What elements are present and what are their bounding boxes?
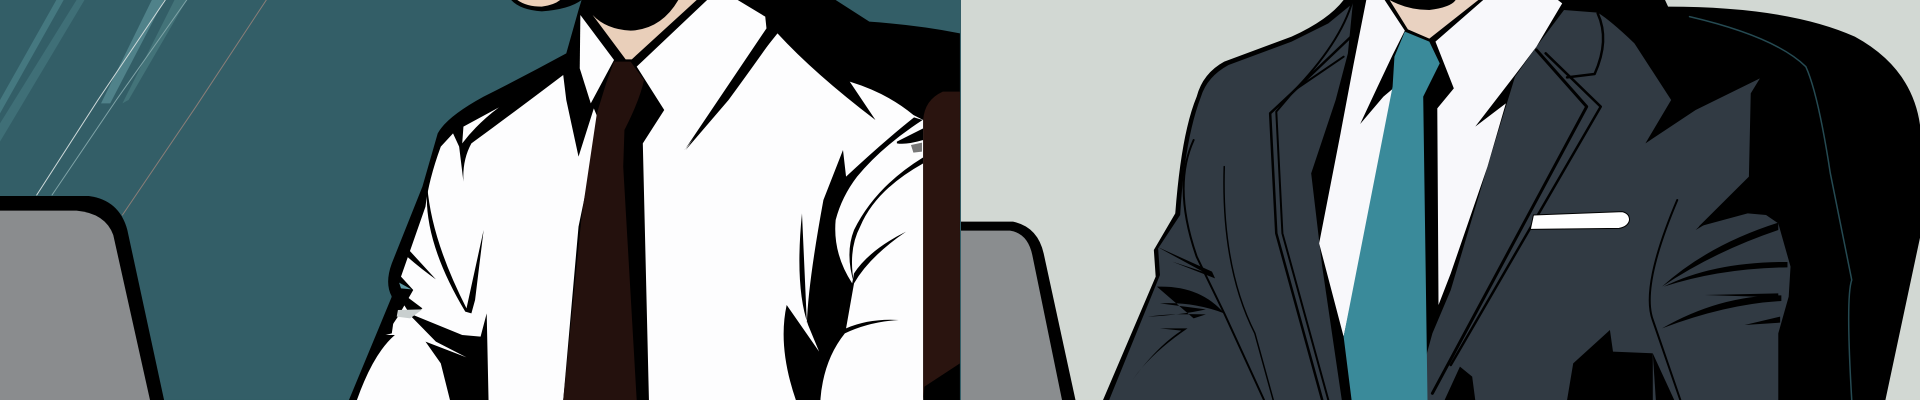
laptop — [0, 196, 164, 400]
neck — [593, 0, 697, 59]
jacket — [1109, 3, 1791, 400]
panel: worker with teal tie on pale background — [961, 0, 1920, 400]
person: body outline and chair — [349, 0, 960, 400]
background: pale grey wall — [961, 0, 1920, 400]
tie: teal — [1344, 32, 1440, 400]
chin — [511, 0, 582, 11]
chair arm: brown — [923, 92, 960, 400]
background: teal wall — [0, 0, 961, 400]
laptop — [961, 222, 1075, 400]
shirt folds left — [386, 28, 923, 400]
sleeve folds left — [1132, 247, 1224, 380]
light streaks on wall — [0, 0, 266, 215]
person: body outline and chair — [1103, 0, 1920, 400]
tie: brown — [563, 62, 644, 400]
shirt — [1319, 0, 1562, 337]
neck — [1390, 0, 1478, 39]
pocket square — [1530, 212, 1630, 229]
sleeve folds right — [1653, 178, 1787, 400]
chair highlight line — [1690, 17, 1852, 400]
shirt — [357, 0, 923, 400]
shirt highlights — [397, 143, 922, 318]
panel: worker with brown tie on teal background — [0, 0, 961, 400]
jacket lines and lapels — [1184, 0, 1680, 400]
